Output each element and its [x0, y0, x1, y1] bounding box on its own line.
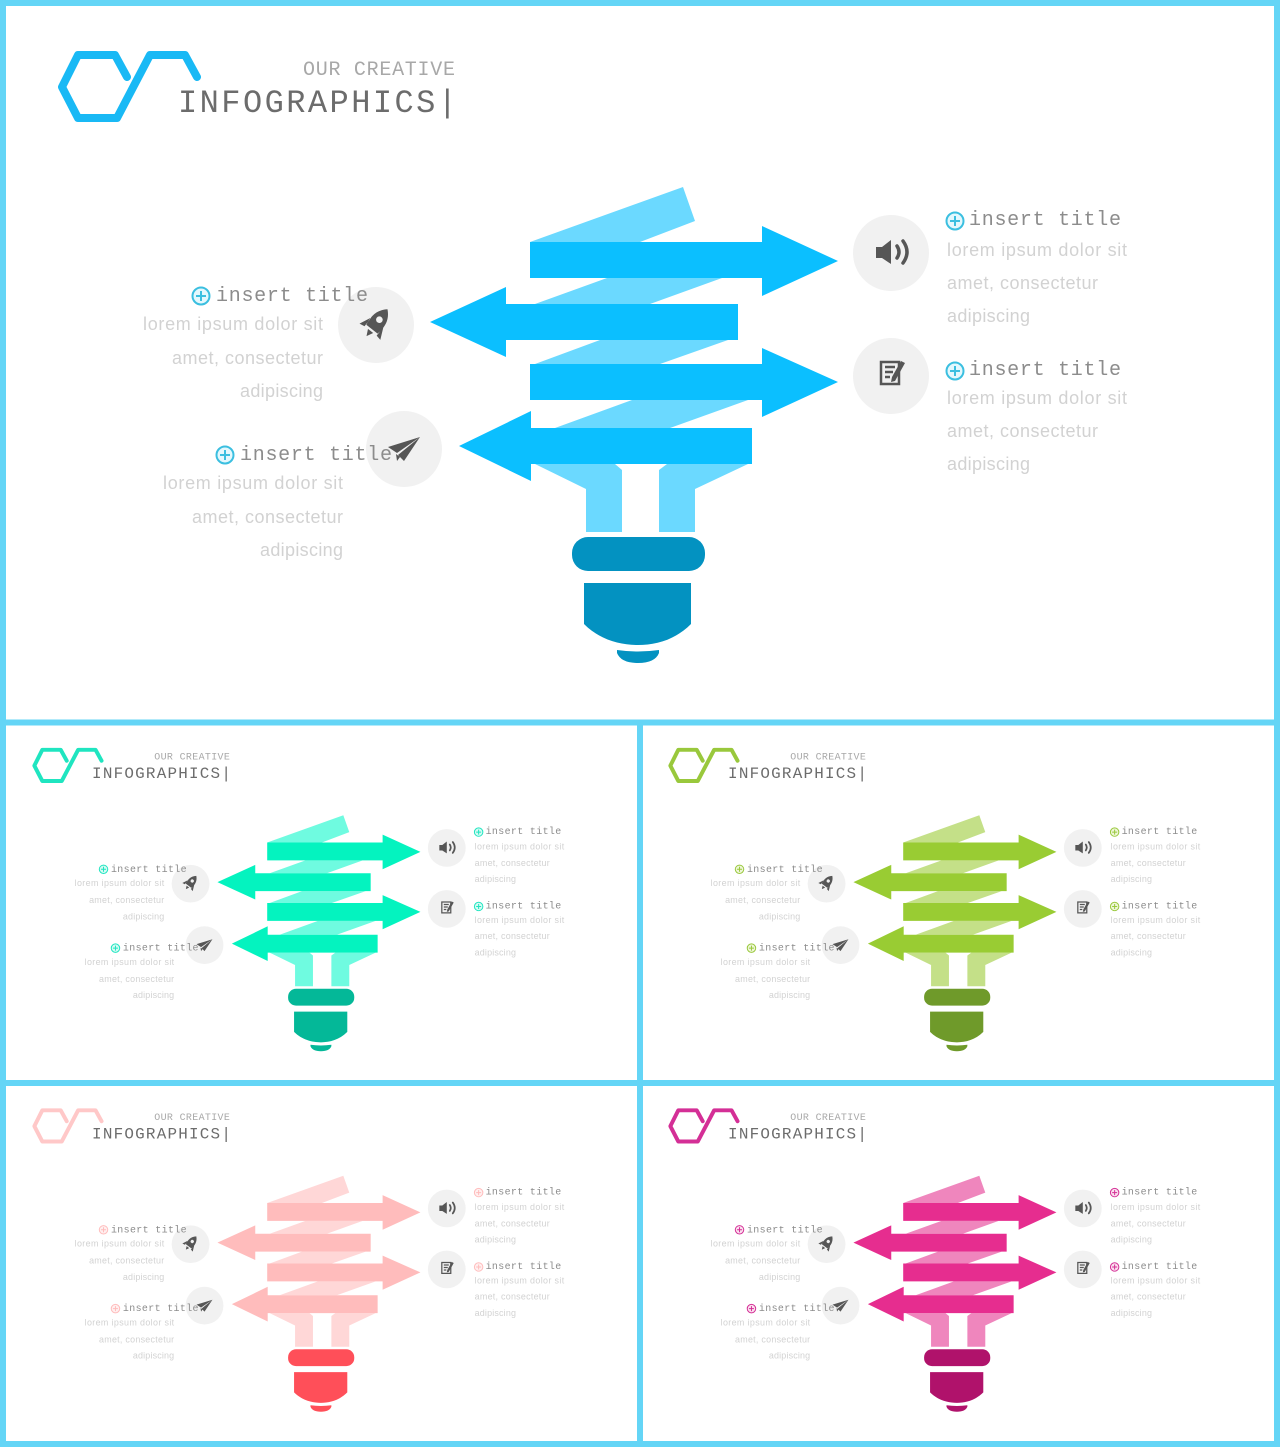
- logo: hexagon: [62, 55, 197, 118]
- text block: right one: insert title: [1122, 1187, 1197, 1198]
- icon: speaker: [428, 1190, 466, 1227]
- text block: right one: insert title: [486, 1187, 561, 1198]
- icon: paper plane: [822, 1287, 859, 1324]
- icon: speaker: [853, 215, 929, 291]
- text block: left one: [711, 864, 823, 921]
- text block: right one: adipiscing: [1111, 1235, 1152, 1245]
- text block: left one: amet, consectetur: [89, 895, 164, 905]
- text block: right one: lorem ipsum dolor sit: [947, 240, 1127, 260]
- text block: right one: insert title: [969, 209, 1121, 232]
- icon: document: [853, 338, 929, 414]
- text block: right two: amet, consectetur: [1111, 931, 1186, 941]
- bulb: teal: [217, 815, 420, 1051]
- text block: left one: insert title: [747, 1224, 823, 1235]
- text block: left two: [721, 1303, 835, 1361]
- icon: paper plane: [186, 926, 223, 964]
- text block: left two: amet, consectetur: [192, 507, 343, 527]
- text block: left two: amet, consectetur: [99, 1334, 174, 1344]
- text block: left two: [721, 943, 835, 1000]
- text block: left one: amet, consectetur: [725, 895, 800, 905]
- heading: teal panel: [92, 752, 231, 783]
- heading: green panel: [728, 752, 867, 783]
- text block: left one: lorem ipsum dolor sit: [143, 314, 323, 334]
- text block: left two: amet, consectetur: [735, 974, 810, 984]
- text block: left two: adipiscing: [260, 540, 343, 560]
- text block: left two: [85, 943, 199, 1000]
- text block: right two: adipiscing: [475, 948, 516, 958]
- text block: left one: lorem ipsum dolor sit: [711, 878, 801, 888]
- text block: left one: insert title: [216, 285, 368, 308]
- heading: magenta panel: [728, 1112, 867, 1144]
- heading: green panel: INFOGRAPHICS|: [728, 765, 867, 783]
- text block: left one: amet, consectetur: [172, 348, 323, 368]
- text block: left two: [163, 444, 392, 560]
- icon: document: [428, 1251, 466, 1288]
- text block: left one: adipiscing: [759, 911, 800, 921]
- text block: left one: adipiscing: [240, 381, 323, 401]
- text block: right two: adipiscing: [947, 454, 1030, 474]
- text block: right one: insert title: [1122, 826, 1197, 837]
- icon: rocket: [338, 287, 414, 363]
- bulb: magenta: [853, 1176, 1056, 1412]
- text block: left two: lorem ipsum dolor sit: [85, 957, 175, 967]
- text block: right two: lorem ipsum dolor sit: [1111, 915, 1201, 925]
- text block: left one: [143, 285, 368, 401]
- text block: right two: lorem ipsum dolor sit: [475, 1275, 565, 1285]
- text block: left two: adipiscing: [133, 1351, 174, 1361]
- heading: coral panel: INFOGRAPHICS|: [92, 1126, 231, 1144]
- text block: right two: insert title: [969, 359, 1121, 382]
- text block: left two: lorem ipsum dolor sit: [85, 1317, 175, 1327]
- panel: green bulb: [643, 726, 1274, 1080]
- text block: left one: adipiscing: [123, 1272, 164, 1282]
- icon: rocket: [808, 865, 845, 903]
- logo: magenta hexagon: [670, 1110, 738, 1142]
- text block: right two: lorem ipsum dolor sit: [475, 915, 565, 925]
- icon: paper plane: [366, 411, 442, 487]
- icon: speaker: [428, 829, 466, 867]
- text block: left one: insert title: [747, 864, 823, 875]
- text block: left two: amet, consectetur: [735, 1334, 810, 1344]
- heading: coral panel: [92, 1112, 231, 1144]
- text block: right one: [946, 209, 1127, 326]
- text block: right two: insert title: [1122, 1261, 1197, 1272]
- text block: left one: amet, consectetur: [89, 1256, 164, 1265]
- text block: left one: lorem ipsum dolor sit: [711, 1239, 801, 1249]
- text block: right one: [1110, 826, 1201, 884]
- text block: left two: amet, consectetur: [99, 974, 174, 984]
- panel: teal bulb: [6, 726, 637, 1080]
- panel: coral bulb: [6, 1086, 637, 1441]
- text block: right one: insert title: [486, 826, 561, 837]
- text block: right two: lorem ipsum dolor sit: [947, 388, 1127, 408]
- text block: left one: [75, 864, 187, 921]
- text block: right two: insert title: [1122, 900, 1197, 911]
- text block: right one: adipiscing: [947, 306, 1030, 326]
- text block: right one: [1110, 1187, 1201, 1245]
- text block: right two: amet, consectetur: [1111, 1292, 1186, 1302]
- icon: document: [1064, 890, 1102, 928]
- text block: left two: lorem ipsum dolor sit: [721, 957, 811, 967]
- panel: main blue bulb: [6, 6, 1274, 720]
- text block: right two: adipiscing: [1111, 1308, 1152, 1318]
- text block: right two: amet, consectetur: [475, 1292, 550, 1302]
- heading: teal panel: INFOGRAPHICS|: [92, 765, 231, 783]
- heading: INFOGRAPHICS|: [178, 85, 457, 122]
- text block: left two: insert title: [240, 444, 392, 467]
- heading: [178, 59, 457, 122]
- heading: teal panel: OUR CREATIVE: [154, 752, 230, 763]
- icon: rocket: [172, 1225, 209, 1263]
- text block: left one: adipiscing: [759, 1272, 800, 1282]
- text block: left one: lorem ipsum dolor sit: [75, 878, 165, 888]
- icon: document: [1064, 1251, 1102, 1288]
- icon: speaker: [1064, 1190, 1102, 1227]
- text block: right one: lorem ipsum dolor sit: [475, 1202, 565, 1212]
- text block: right two: adipiscing: [1111, 948, 1152, 958]
- text block: left one: [711, 1224, 823, 1282]
- logo: teal hexagon: [34, 750, 102, 781]
- text block: right two: adipiscing: [475, 1308, 516, 1318]
- text block: left two: adipiscing: [769, 990, 810, 1000]
- text block: right one: amet, consectetur: [475, 858, 550, 868]
- text block: right one: amet, consectetur: [475, 1218, 550, 1228]
- icon: document: [428, 890, 466, 928]
- heading: coral panel: OUR CREATIVE: [154, 1112, 230, 1123]
- text block: left two: insert title: [759, 1303, 835, 1314]
- text block: left two: lorem ipsum dolor sit: [163, 473, 343, 493]
- bulb: [430, 187, 838, 663]
- panel: magenta bulb: [643, 1086, 1274, 1441]
- heading: magenta panel: OUR CREATIVE: [790, 1112, 866, 1123]
- text block: right two: [946, 359, 1127, 474]
- icon: rocket: [808, 1225, 845, 1263]
- bulb: green: [853, 815, 1056, 1051]
- text block: right one: amet, consectetur: [1111, 858, 1186, 868]
- text block: right one: adipiscing: [475, 1235, 516, 1245]
- text block: right two: [1110, 900, 1201, 958]
- text block: right two: insert title: [486, 1261, 561, 1272]
- text block: left two: [85, 1303, 199, 1361]
- text block: right two: insert title: [486, 900, 561, 911]
- logo: green hexagon: [670, 750, 738, 781]
- text block: left one: adipiscing: [123, 911, 164, 921]
- text block: right one: lorem ipsum dolor sit: [475, 841, 565, 851]
- logo: pink hexagon: [34, 1110, 102, 1142]
- text block: left one: [75, 1224, 187, 1282]
- heading: magenta panel: INFOGRAPHICS|: [728, 1126, 867, 1144]
- text block: left two: insert title: [123, 1303, 199, 1314]
- text block: right one: amet, consectetur: [1111, 1218, 1186, 1228]
- text block: right one: [474, 826, 565, 884]
- heading: green panel: OUR CREATIVE: [790, 752, 866, 763]
- text block: left one: amet, consectetur: [725, 1256, 800, 1265]
- text block: right two: [474, 1261, 565, 1318]
- text block: left two: adipiscing: [133, 990, 174, 1000]
- text block: left one: insert title: [111, 1224, 187, 1235]
- text block: right one: lorem ipsum dolor sit: [1111, 1202, 1201, 1212]
- text block: left two: insert title: [123, 943, 199, 954]
- text block: left one: lorem ipsum dolor sit: [75, 1239, 165, 1249]
- icon: speaker: [1064, 829, 1102, 867]
- text block: right one: adipiscing: [475, 874, 516, 884]
- icon: rocket: [172, 865, 209, 903]
- text block: right two: amet, consectetur: [947, 421, 1098, 441]
- icon: paper plane: [186, 1287, 223, 1324]
- heading: OUR CREATIVE: [303, 59, 455, 82]
- text block: left one: insert title: [111, 864, 187, 875]
- icon: paper plane: [822, 926, 859, 964]
- text block: left two: lorem ipsum dolor sit: [721, 1317, 811, 1327]
- text block: right one: adipiscing: [1111, 874, 1152, 884]
- bulb: coral: [217, 1176, 420, 1412]
- text block: right one: lorem ipsum dolor sit: [1111, 841, 1201, 851]
- text block: right one: amet, consectetur: [947, 273, 1098, 293]
- text block: right one: [474, 1187, 565, 1245]
- text block: right two: amet, consectetur: [475, 931, 550, 941]
- text block: right two: lorem ipsum dolor sit: [1111, 1275, 1201, 1285]
- text block: right two: [474, 900, 565, 958]
- text block: left two: insert title: [759, 943, 835, 954]
- text block: left two: adipiscing: [769, 1351, 810, 1361]
- text block: right two: [1110, 1261, 1201, 1318]
